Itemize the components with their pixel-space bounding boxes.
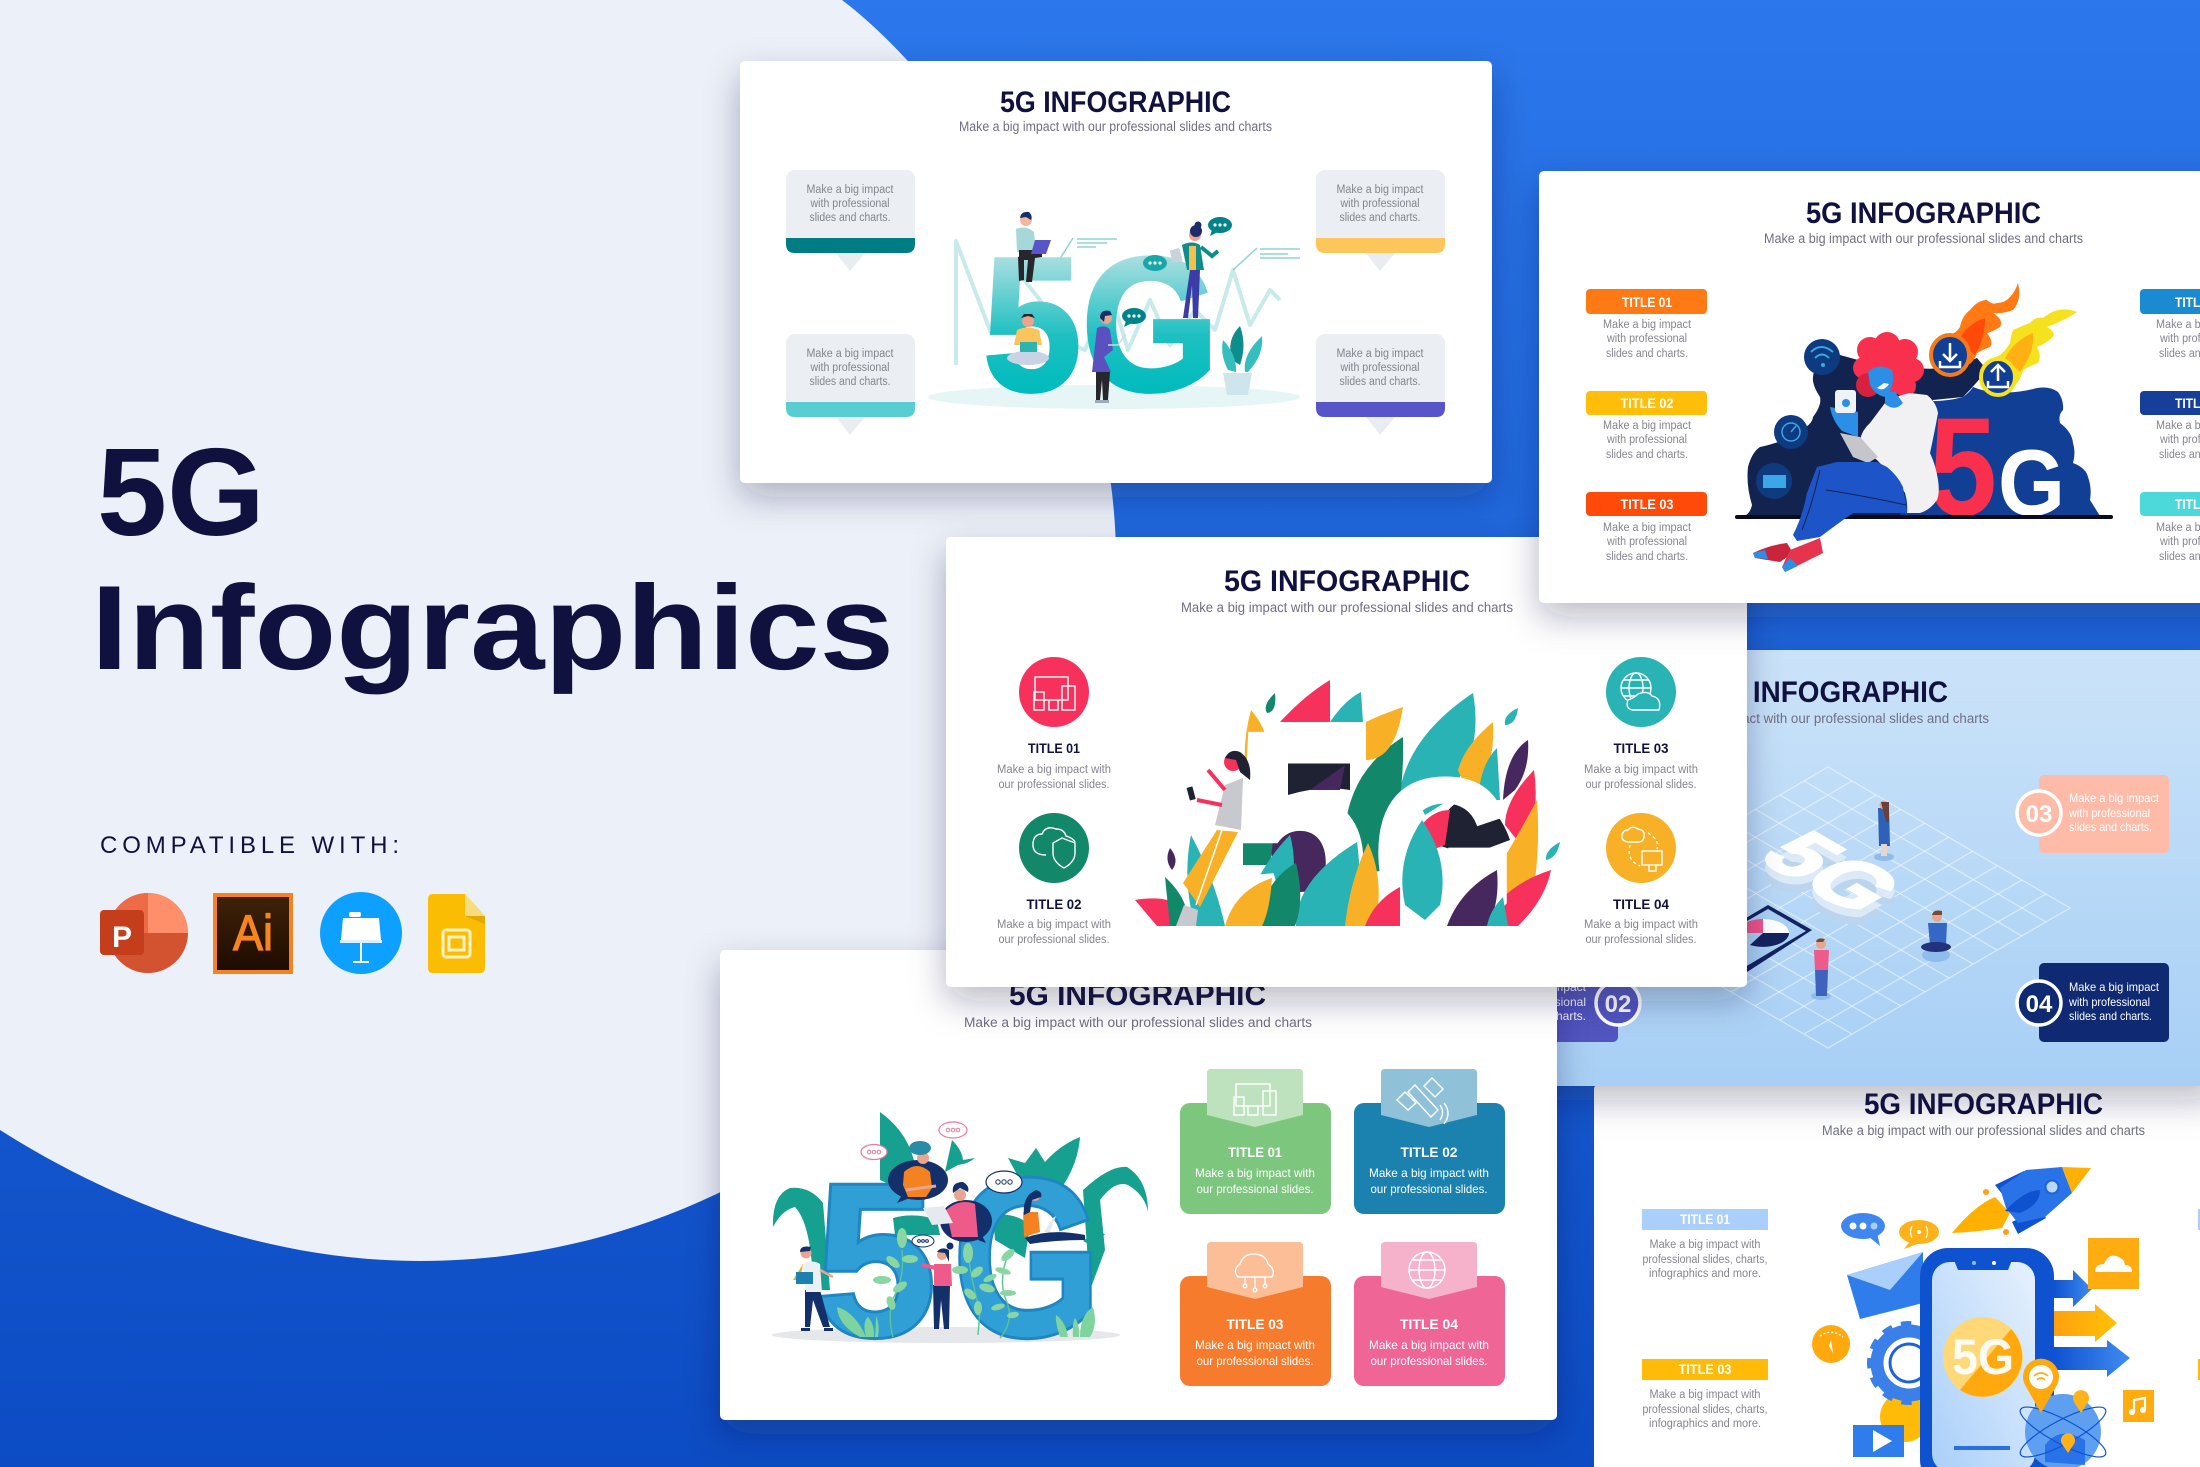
feature: title 02: Make a big impact with [997,919,1111,931]
callout: bottom left: slides and charts. [810,376,890,388]
callout 04: Make a big impact [2069,980,2160,994]
feature: title 03 [1584,657,1698,791]
tile: title 04: TITLE 04 [1400,1316,1458,1332]
back plants [773,1112,1148,1290]
callout: bottom left: with professional [810,362,890,374]
label block: title 01: infographics and more. [1649,1268,1761,1280]
heading: 5G INFOGRAPHIC [1224,565,1470,598]
panel: light blue isometric slide [1489,650,2200,1086]
feature: title 04: our professional slides. [1586,934,1696,946]
speech bubble: lower [1122,308,1146,327]
isometric grid [1586,767,2070,1048]
tile: title 01: Make a big impact with [1195,1166,1315,1180]
illustration: white G: G [1372,734,1517,971]
isometric 5G letters: 5G [1740,835,1924,941]
speech bubble: middle [1143,255,1167,271]
tile: title 02: Make a big impact with [1369,1166,1489,1180]
callout 04 [2017,963,2169,1042]
callout: bottom right: with professional [1340,362,1420,374]
illustration: foreground leaves [1135,693,1560,926]
tile: title 03: TITLE 03 [1226,1316,1284,1332]
tile: title 04: our professional slides. [1370,1354,1488,1368]
callout 03 [2017,775,2169,853]
feature: title 01: Make a big impact with [997,764,1111,776]
person: woman on G [1170,222,1218,318]
heading: 5G INFOGRAPHIC [1708,676,1948,709]
icon: cloud tile [2088,1238,2139,1289]
feature: title 02: our professional slides. [998,934,1110,946]
illustration: teal 5G with people [928,212,1300,431]
phone [1920,1248,2054,1467]
callout 04: slides and charts. [2069,1009,2152,1023]
flame: download [1931,283,2019,375]
icon: rocket [1952,1167,2091,1235]
big G: G [953,1133,1101,1383]
tablet with pie chart [1700,905,1812,972]
icon: gears [1871,1325,1947,1442]
hair [1853,332,1924,397]
label block: title 02 [1586,391,1707,461]
callout 02: slides and charts. [1493,1009,1586,1023]
sweater [1860,393,1939,513]
person: pink with laptop [923,1182,992,1243]
arrows from phone [2054,1270,2130,1377]
person: sitting in 5 [1007,314,1049,365]
callout 02 [1489,963,1640,1042]
person: woman with phone [1176,751,1250,926]
isometric 5G letters: 5G [1740,819,1924,925]
isometric 5G letters: 5G [1740,827,1924,933]
subheading: Make a big impact with our professional slides and charts [1764,231,2083,246]
illustration: leaves behind 5G [1240,680,1551,926]
feature: title 01 [997,657,1111,791]
plant in pot [1222,326,1262,395]
tile: title 02: TITLE 02 [1400,1144,1458,1160]
label block: title 03: professional slides, charts, [1642,1404,1768,1416]
icon: PowerPoint [100,893,188,973]
shrubs [837,1307,1095,1337]
heading: 5G INFOGRAPHIC [1009,979,1266,1012]
icon: PowerPoint: P [112,921,132,954]
main title: 5G [97,424,265,562]
subheading: Make a big impact with our professional slides and charts [1822,1123,2145,1138]
5G lettering: G [1998,430,2065,535]
callout 04: 04 [2026,991,2053,1018]
panel: slide with leaves [946,537,1747,987]
icon: video play [1853,1425,1904,1457]
heading: 5G INFOGRAPHIC [1806,197,2041,230]
panel: slide with four colored tiles [720,950,1557,1420]
feature: title 01: TITLE 01 [1028,740,1080,756]
label block: title 01 [1586,289,1707,360]
callout: top left: Make a big impact [806,184,894,196]
subheading: Make a big impact with our professional slides and charts [964,1015,1312,1030]
callout: top right: slides and charts. [1340,212,1420,224]
callout: top right: with professional [1340,198,1420,210]
feature: title 02: TITLE 02 [1026,896,1082,912]
phone: 5G [1952,1329,2014,1385]
callout: top right: Make a big impact [1336,184,1424,196]
heading: 5G INFOGRAPHIC [1000,86,1231,119]
vines [890,1250,1009,1338]
callout: top right [1316,170,1445,271]
callout 02: 02 [1605,991,1631,1018]
illustration: woman with phone and 5G [1735,283,2113,572]
icon: chat bubble yellow [1899,1220,1939,1249]
illustration: phone and icons [1812,1167,2154,1467]
callout: bottom right: slides and charts. [1340,376,1420,388]
heading: 5G INFOGRAPHIC [1864,1088,2103,1121]
icon: envelope [1847,1252,1923,1319]
person: sitting man [1921,910,1951,962]
feature: title 03: Make a big impact with [1584,764,1698,776]
label block: right column 1 [2140,289,2200,360]
label block: title 03: TITLE 03 [1620,496,1674,512]
icon: Illustrator: Ai [233,905,273,961]
callout 02: with professional [1496,995,1586,1009]
feature: title 04 [1584,813,1698,946]
tile: title 04: Make a big impact with [1369,1338,1489,1352]
callout: bottom right: Make a big impact [1336,348,1424,360]
label block: title 03: with professional [1606,536,1687,548]
feature: title 03: our professional slides. [1586,779,1696,791]
label block: title 01: TITLE 01 [1622,294,1672,310]
subheading: Make a big impact with our professional slides and charts [959,119,1272,134]
person: woman with laptop [1023,1190,1105,1244]
label block: title 02: slides and charts. [1606,449,1688,461]
icon: Illustrator [213,893,293,974]
label block: title 03 [1642,1359,1768,1430]
icon: Keynote [320,892,402,974]
hand and phone [1830,407,1858,437]
callout 04: with professional [2068,995,2150,1009]
label block: title 02: Make a big impact [1603,420,1692,432]
person: woman standing [922,1242,954,1329]
label block: title 03 [1586,492,1707,563]
person: man in pink [1811,938,1831,1000]
subheading: Make a big impact with our professional slides and charts [1181,600,1513,615]
person: woman [1874,800,1894,861]
callout: bottom left: Make a big impact [806,348,894,360]
person: standing with laptop [1092,311,1125,403]
label block: title 03: infographics and more. [1649,1418,1761,1430]
callout 02: Make a big impact [1489,980,1587,994]
callout 03: slides and charts. [2069,820,2152,834]
icon: speed gauge [1812,1325,1850,1363]
woman figure [1753,332,1939,572]
feature: title 01: our professional slides. [998,779,1110,791]
subheading: Make a big impact with our professional slides and charts [1652,711,1989,726]
feature: title 04: Make a big impact with [1584,919,1698,931]
illustration: blue 5G with people and plants [772,1112,1148,1383]
tile: title 04 [1354,1242,1505,1386]
illustration: white 5: 5 [1231,674,1369,986]
label block: title 03: Make a big impact [1603,522,1692,534]
label block: title 01: Make a big impact with [1650,1239,1760,1251]
feature: title 02 [997,813,1111,946]
label block: title 01: Make a big impact [1603,319,1692,331]
tile: title 01: our professional slides. [1196,1182,1314,1196]
tile: title 02: our professional slides. [1370,1182,1488,1196]
callout: bottom left [786,334,915,435]
main title: Infographics [91,561,894,695]
callout 03: 03 [2026,801,2052,828]
compatible with label: COMPATIBLE WITH: [100,832,399,859]
tile: title 01 [1180,1069,1331,1214]
callout: top left [786,170,915,271]
icon: mail [1756,463,1792,499]
label block: title 01: TITLE 01 [1680,1211,1730,1227]
main title [91,424,894,695]
panel: slide with callout boxes [740,61,1492,483]
feature: title 04: TITLE 04 [1613,896,1669,912]
shoes [1753,538,1823,572]
label block: title 01 [1642,1209,1768,1280]
callout 03: with professional [2068,806,2150,820]
tile: title 01: TITLE 01 [1228,1144,1282,1160]
label block: title 02: with professional [1606,434,1687,446]
label block: title 03: Make a big impact with [1650,1389,1760,1401]
callout 03: Make a big impact [2069,791,2160,805]
icon: chat bubble blue [1841,1213,1885,1246]
label block: title 03: slides and charts. [1606,551,1688,563]
flame: upload [1981,309,2077,395]
background: light blob [0,0,1116,1261]
label block: title 01: slides and charts. [1606,348,1688,360]
person: man with folder [793,1247,833,1331]
big 5: 5 [816,1139,936,1381]
person: top with bubble [888,1141,948,1203]
5G lettering [1929,388,2065,545]
label block: title 02: TITLE 02 [1620,395,1674,411]
5G lettering: 5 [1929,388,1997,545]
illustration: teal 5G with people: 5G [983,219,1219,431]
callout: top left: slides and charts. [810,212,890,224]
person: top left with laptop [1016,212,1051,282]
callout: top left: with professional [810,198,890,210]
panel: slide with phone and rocket [1594,1085,2200,1467]
icon: music tile [2123,1390,2154,1422]
label block: title 01: with professional [1606,333,1687,345]
label block: right column 3 [2140,492,2200,563]
pants [1793,462,1907,541]
icon: gauge [1774,415,1808,449]
tile: title 03: our professional slides. [1196,1354,1314,1368]
globe with pins [2015,1359,2111,1467]
label block: right column 2 [2140,391,2200,461]
feature: title 03: TITLE 03 [1614,740,1669,756]
tile: title 02 [1354,1069,1505,1214]
label block: title 01: professional slides, charts, [1642,1254,1768,1266]
label block: title 03: TITLE 03 [1678,1361,1732,1377]
neck and face [1885,392,1903,408]
speech bubble: right [1208,217,1232,236]
tile: title 03 [1180,1242,1331,1386]
speech bubbles [861,1122,1022,1247]
icon: wifi [1804,339,1840,375]
tile: title 03: Make a big impact with [1195,1338,1315,1352]
panel: slide with fire and phone user [1539,171,2200,603]
callout: bottom right [1316,334,1445,435]
icon: Google Slides [428,894,485,973]
